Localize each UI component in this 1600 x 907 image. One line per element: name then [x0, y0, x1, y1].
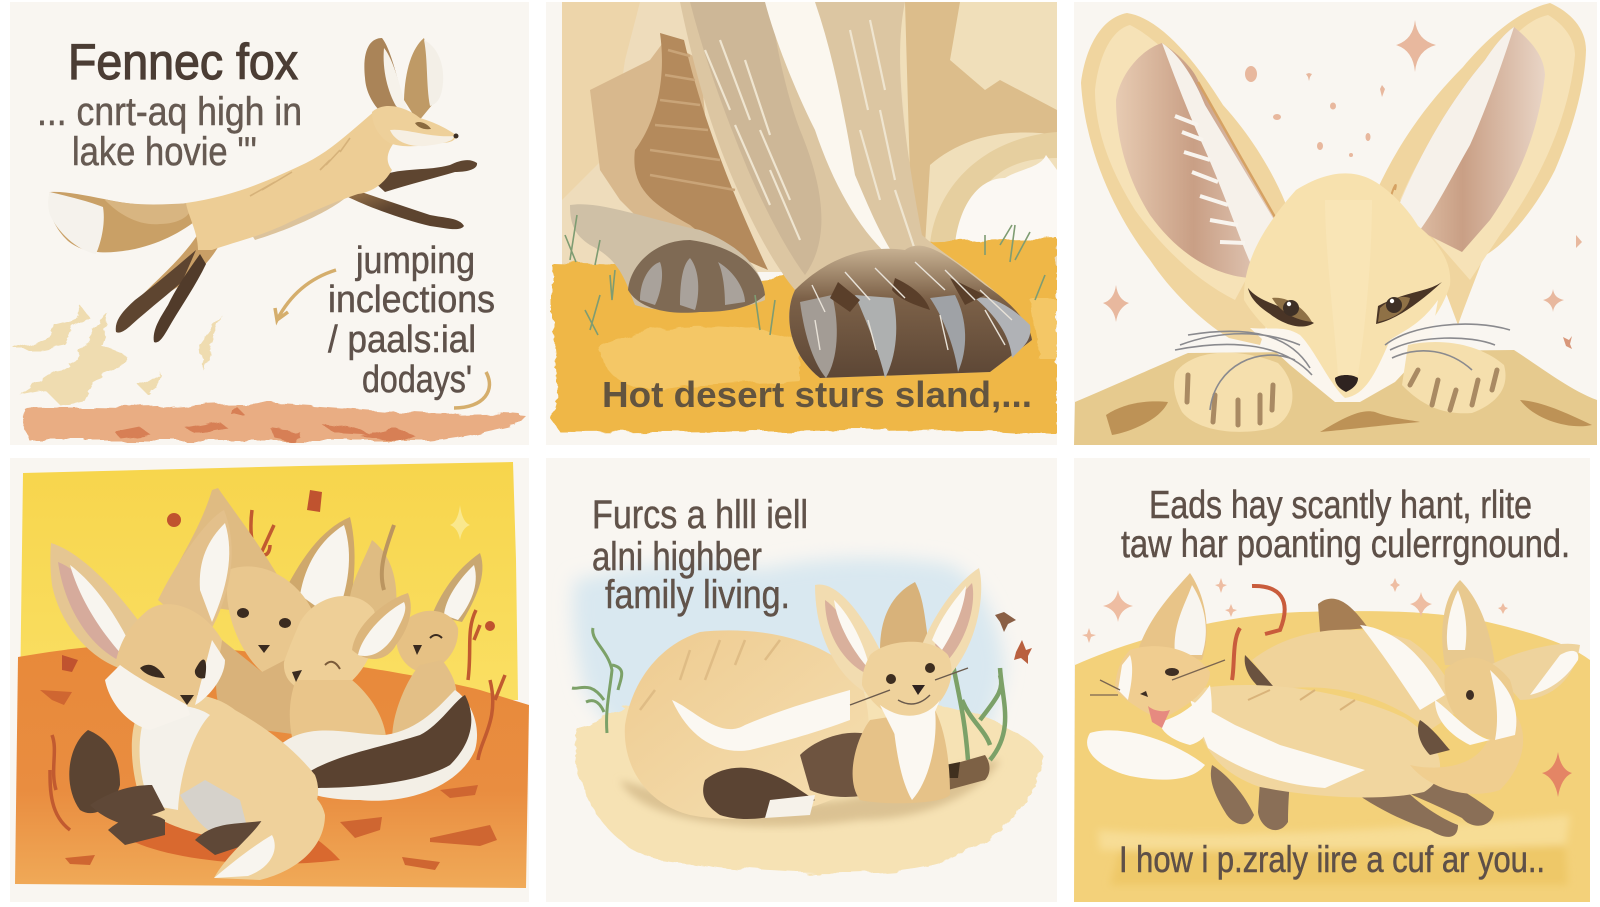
subtitle text: lake hovie '''	[72, 130, 257, 174]
icon: second fox faces	[237, 608, 442, 682]
icon: right ear	[1377, 3, 1586, 325]
caption	[592, 493, 808, 617]
captions	[1119, 484, 1570, 880]
ground: red sand strip	[23, 403, 525, 441]
background: sand bands	[1098, 815, 1570, 885]
desert ground	[552, 238, 1057, 435]
side text: inclections	[328, 279, 495, 321]
arrow: curl	[454, 372, 489, 408]
icon: main fox	[50, 510, 325, 880]
icon: red squiggle	[1232, 586, 1285, 680]
caption: Furcs a hlll iell	[592, 493, 808, 537]
subtitle text	[40, 96, 300, 166]
side text: jumping	[355, 240, 475, 282]
ground dust	[15, 305, 222, 405]
icon: left fox head	[1090, 573, 1225, 745]
icon: fox head	[1244, 173, 1450, 402]
icon: nose	[1335, 375, 1358, 392]
icon: sitting fox	[815, 568, 981, 803]
icon: upper fox body	[1245, 599, 1460, 730]
caption: family living.	[605, 573, 790, 617]
icon: curled fox	[625, 630, 890, 819]
accent stars	[62, 490, 495, 672]
icon: curled tail	[1410, 705, 1523, 794]
panel: fox family	[10, 458, 529, 902]
icon: lower fox legs	[1211, 750, 1494, 837]
panel: paw close-up	[546, 2, 1057, 445]
icon: stars	[995, 612, 1032, 664]
panel: big ears portrait	[1074, 2, 1597, 445]
icon: back foxes	[178, 488, 482, 738]
icon: front paws	[1174, 342, 1506, 432]
subtitle text: ... cnrt-aq high in	[37, 90, 302, 134]
icon: grass tufts	[565, 215, 1045, 335]
icon: big white and dark tail	[280, 690, 477, 801]
icon: leaping fox	[48, 38, 477, 342]
background: blue wash	[573, 558, 1005, 740]
icon: red branches and stars	[50, 510, 505, 830]
sparkles	[1103, 20, 1582, 349]
sparkles	[1082, 578, 1508, 643]
mound shadows	[1106, 400, 1592, 435]
accent: red sparkle	[1542, 752, 1572, 797]
panel: curled fox family	[546, 458, 1057, 902]
side text: / paals:ial	[328, 319, 476, 361]
sand mound	[1074, 350, 1597, 445]
icon: fox eyes	[1248, 282, 1442, 327]
sand patch	[575, 690, 1042, 874]
icon: tail white	[1087, 730, 1205, 780]
icon: plants	[572, 628, 1005, 760]
icon: log	[943, 755, 990, 790]
background fur shading	[562, 2, 1057, 280]
icon: right fox head	[1418, 580, 1580, 755]
background: orange ground	[15, 644, 529, 888]
arrow: jump	[275, 270, 336, 320]
side text: dodays'	[362, 359, 472, 401]
whiskers	[1175, 324, 1510, 410]
background: yellow sky	[20, 462, 518, 700]
icon: big leg and paw	[680, 2, 1032, 378]
ground decoration	[40, 690, 497, 870]
panel: playing foxes	[1074, 458, 1590, 902]
title: Fennec fox	[68, 34, 298, 90]
icon: left ear	[1081, 13, 1296, 345]
icon: lower fox body	[1190, 685, 1440, 797]
caption: alni highber	[592, 535, 762, 579]
panel: leaping fox with title	[10, 2, 529, 445]
side text	[328, 240, 495, 401]
caption: Hot desert sturs sland,...	[602, 374, 1032, 415]
icon: small back paw	[570, 204, 765, 313]
background: sand	[1074, 611, 1590, 902]
